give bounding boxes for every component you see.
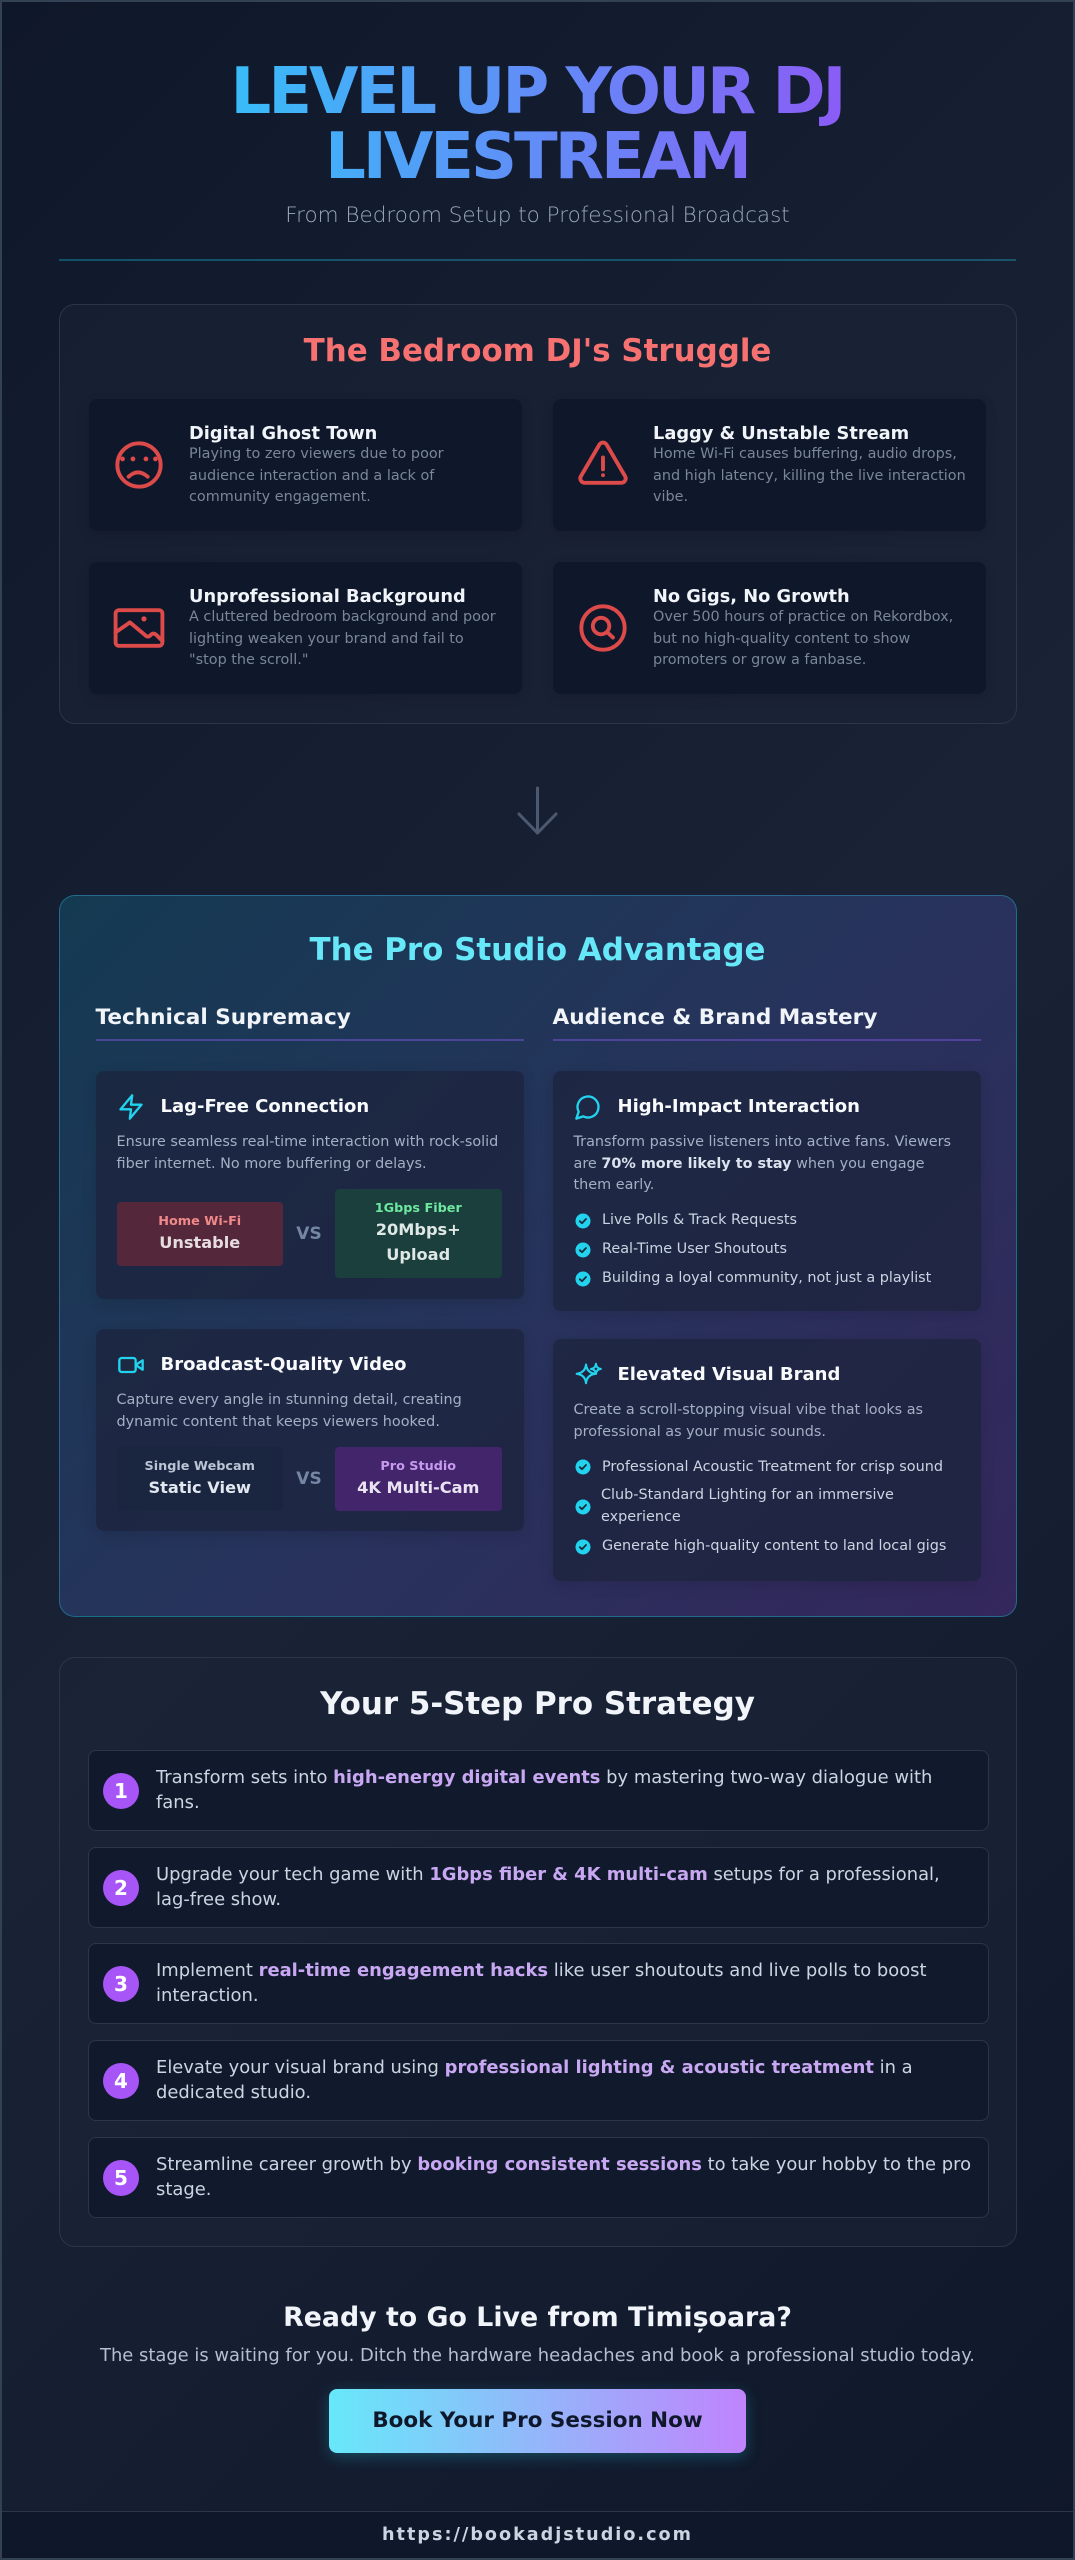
- heading: strategy: Your 5-Step Pro Strategy: [320, 1686, 755, 1722]
- card text: Ensure seamless real-time interaction with rock-solid fiber internet. No more buffering or delays.: [116, 1134, 498, 1172]
- card: digital ghost town: [89, 399, 522, 531]
- icon: warning triangle: [578, 440, 628, 485]
- after box: [335, 1447, 502, 1511]
- icon: frowning face: [115, 441, 163, 489]
- card title: Elevated Visual Brand: [618, 1364, 840, 1385]
- label: 1Gbps Fiber: [375, 1201, 462, 1216]
- value: Unstable: [159, 1233, 240, 1252]
- checklist: [576, 1459, 946, 1554]
- call to action heading: Ready to Go Live from Timișoara?: [283, 2302, 792, 2333]
- number badge: [103, 2062, 139, 2098]
- card: elevated visual brand: [552, 1338, 980, 1580]
- number badge: 2: [114, 1876, 128, 1900]
- step text: [156, 2057, 913, 2103]
- card text: Over 500 hours of practice on Rekordbox, but no high-quality content to show promoters or grow a fanbase.: [653, 609, 953, 668]
- heading: audience and brand mastery: Audience & Brand Mastery: [552, 1005, 877, 1030]
- step 1: [88, 1750, 988, 1831]
- checklist: [576, 1212, 931, 1286]
- heading: struggle: The Bedroom DJ's Struggle: [304, 333, 771, 369]
- step 4: [88, 2040, 988, 2121]
- heading: audience and brand mastery: [552, 995, 980, 1041]
- card header: [119, 1094, 369, 1120]
- value: Static View: [148, 1478, 251, 1497]
- card text: A cluttered bedroom background and poor lighting weaken your brand and fail to "stop the scroll.": [189, 609, 496, 668]
- panel: 5-step pro strategy: [58, 1657, 1016, 2247]
- card: unprofessional background: [89, 562, 522, 694]
- card header: [575, 1095, 860, 1120]
- card: no gigs: [553, 562, 986, 694]
- card: laggy stream: [553, 399, 986, 531]
- step text: stage.: [156, 2179, 211, 2200]
- before box: [116, 1447, 283, 1511]
- card title: Unprofessional Background: [189, 586, 466, 606]
- title: LEVEL UP YOUR DJ LIVESTREAM: [231, 55, 843, 194]
- value: 20Mbps+ Upload: [376, 1220, 461, 1264]
- card title: Digital Ghost Town: [189, 422, 377, 444]
- comparison: [117, 1189, 502, 1278]
- label: Pro Studio: [380, 1459, 456, 1474]
- arrow: down: [518, 786, 558, 834]
- icon: chat bubble: [575, 1095, 600, 1120]
- subtitle: From Bedroom Setup to Professional Broadcast: [285, 203, 790, 228]
- vs: VS: [296, 1469, 322, 1489]
- card title: Lag-Free Connection: [160, 1096, 369, 1117]
- step text: Elevate your visual brand using professional lighting & acoustic treatment in a: [156, 2057, 913, 2078]
- card text: Create a scroll-stopping visual vibe that looks as professional as your music sounds.: [574, 1402, 923, 1440]
- card: high-impact interaction: [552, 1070, 980, 1310]
- step text: Upgrade your tech game with 1Gbps fiber & 4K multi-cam setups for a professional,: [156, 1864, 940, 1885]
- card header: [576, 1362, 840, 1385]
- label: Home Wi-Fi: [158, 1214, 241, 1229]
- list item: Live Polls & Track Requests: [602, 1212, 797, 1228]
- card: broadcast-quality video: [96, 1328, 524, 1530]
- step text: lag-free show.: [156, 1889, 281, 1910]
- card text: Home Wi-Fi causes buffering, audio drops, and high latency, killing the live interaction vibe.: [653, 446, 966, 505]
- step text: [156, 1960, 926, 2006]
- step 5: [88, 2137, 988, 2218]
- icon: magnifier in circle: [579, 604, 627, 652]
- card header: [118, 1354, 407, 1375]
- step text: Implement real-time engagement hacks like user shoutouts and live polls to boost: [156, 1960, 926, 1981]
- step text: dedicated studio.: [156, 2082, 311, 2103]
- footer: https://bookadjstudio.com: [382, 2525, 693, 2545]
- card title: No Gigs, No Growth: [653, 586, 850, 606]
- number badge: 1: [114, 1778, 128, 1802]
- card: lag-free connection: [96, 1070, 524, 1298]
- step text: [156, 1767, 932, 1813]
- heading: pro studio: The Pro Studio Advantage: [310, 932, 765, 968]
- step text: [156, 2154, 971, 2200]
- step text: fans.: [156, 1792, 200, 1813]
- card text: Capture every angle in stunning detail, creating dynamic content that keeps viewers hooked.: [116, 1392, 462, 1430]
- value: 4K Multi-Cam: [357, 1478, 479, 1497]
- card text: Playing to zero viewers due to poor audience interaction and a lack of community engagement.: [189, 446, 444, 505]
- before box: [116, 1202, 283, 1266]
- panel: the pro studio advantage: [58, 895, 1016, 1617]
- card title: Laggy & Unstable Stream: [653, 422, 909, 444]
- panel: the bedroom DJ's struggle: [58, 304, 1016, 724]
- comparison: [145, 1447, 502, 1511]
- step text: [156, 1864, 940, 1910]
- heading: technical supremacy: [96, 995, 524, 1041]
- card title: High-Impact Interaction: [618, 1096, 860, 1117]
- button: book session: Book Your Pro Session Now: [372, 2408, 703, 2433]
- number badge: 5: [114, 2166, 128, 2190]
- button: book session: [329, 2389, 746, 2453]
- number badge: [103, 1772, 139, 1808]
- icon: video camera: [118, 1356, 144, 1374]
- icon: lightning bolt: [119, 1094, 143, 1120]
- after box: [335, 1189, 502, 1278]
- list item: Building a loyal community, not just a playlist: [602, 1270, 931, 1286]
- vs: VS: [296, 1224, 322, 1244]
- heading: technical supremacy: Technical Supremacy: [96, 1005, 351, 1030]
- icon: picture: [114, 608, 164, 648]
- step text: Transform sets into high-energy digital events by mastering two-way dialogue with: [156, 1767, 932, 1788]
- call to action text: The stage is waiting for you. Ditch the hardware headaches and book a professional studio today.: [100, 2345, 975, 2366]
- step text: Streamline career growth by booking consistent sessions to take your hobby to the pro: [156, 2154, 971, 2175]
- label: Single Webcam: [145, 1459, 255, 1474]
- number badge: 4: [114, 2068, 128, 2092]
- step text: interaction.: [156, 1985, 259, 2006]
- number badge: 3: [114, 1972, 128, 1996]
- step 3: [88, 1943, 988, 2024]
- list item: Real-Time User Shoutouts: [602, 1241, 787, 1257]
- step 2: [88, 1847, 988, 1928]
- footer: [2, 2511, 1073, 2558]
- card text: Transform passive listeners into active fans. Viewers are 70% more likely to stay when you engage them early.: [574, 1134, 951, 1193]
- number badge: [103, 1966, 139, 2002]
- card title: Broadcast-Quality Video: [160, 1354, 407, 1375]
- list item: Generate high-quality content to land local gigs: [602, 1538, 946, 1554]
- number badge: [103, 1870, 139, 1906]
- list item: Club-Standard Lighting for an immersive experience: [601, 1487, 894, 1525]
- icon: sparkles: [576, 1362, 602, 1384]
- list item: Professional Acoustic Treatment for crisp sound: [602, 1459, 943, 1475]
- number badge: [103, 2160, 139, 2196]
